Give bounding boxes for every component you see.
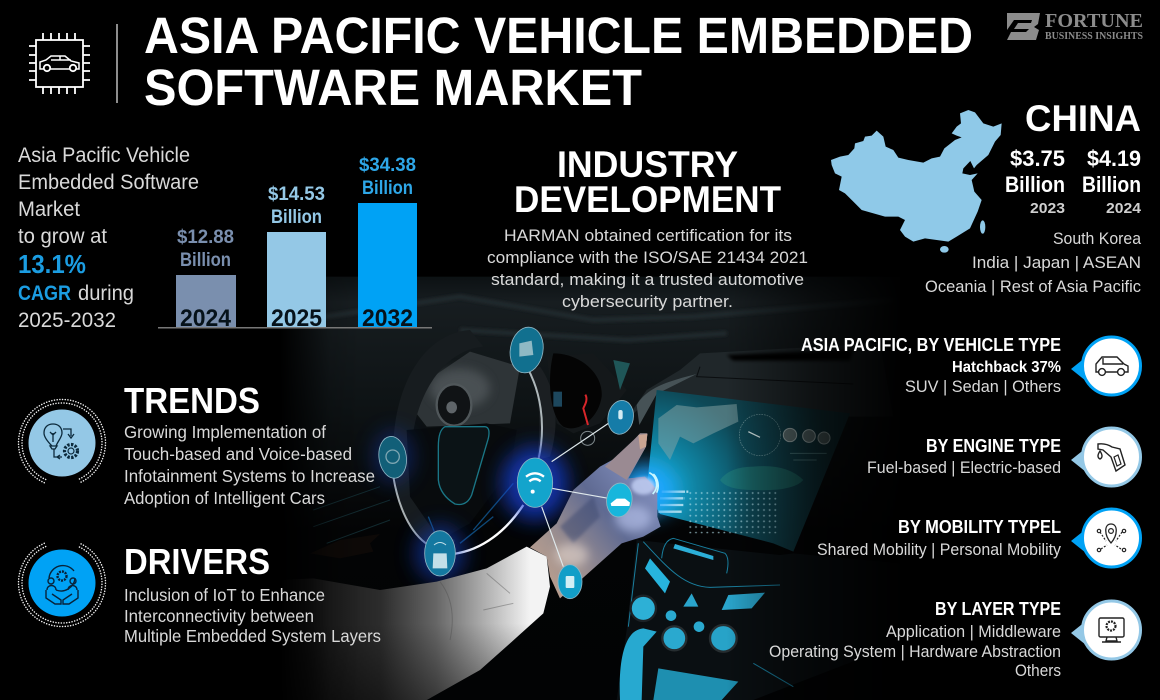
bar chart: market size: Billion <box>180 250 231 271</box>
panel: by vehicle type <box>801 335 1140 396</box>
other countries list: Oceania | Rest of Asia Pacific <box>925 277 1141 296</box>
panel: by mobility type: Shared Mobility | Personal Mobility <box>817 540 1061 559</box>
panel: drivers: Multiple Embedded System Layers <box>124 626 381 646</box>
icon nodes <box>376 325 636 599</box>
bar chart: market size: $12.88 <box>177 227 234 248</box>
panel: by layer type: Application | Middleware <box>886 622 1061 641</box>
bar chart: market size: Billion <box>362 178 413 199</box>
logo: Fortune Business Insights: BUSINESS INSIGHTS <box>1045 31 1143 42</box>
panel: drivers: Inclusion of IoT to Enhance <box>124 585 325 605</box>
panel: trends: Adoption of Intelligent Cars <box>124 488 325 508</box>
logo: Fortune Business Insights <box>1007 10 1143 42</box>
panel: trends: Infotainment Systems to Increase <box>124 466 375 486</box>
bar chart: market size: $34.38 <box>359 155 416 176</box>
market growth text <box>18 144 199 332</box>
China market values: $3.75 <box>1010 146 1065 171</box>
bar chart: market size <box>158 155 432 332</box>
market growth text: Embedded Software <box>18 171 199 194</box>
panel: by layer type: BY LAYER TYPE <box>935 599 1061 619</box>
map: China <box>831 110 1002 253</box>
panel: trends: TRENDS <box>124 380 260 421</box>
China market values: Billion <box>1082 172 1141 197</box>
infotainment screen <box>647 390 850 552</box>
panel: by layer type <box>769 599 1140 680</box>
glows <box>618 465 675 515</box>
sleeve <box>280 547 550 700</box>
China market values: $4.19 <box>1087 146 1141 171</box>
industry development text <box>487 226 808 311</box>
industry development text: HARMAN obtained certification for its <box>504 226 792 245</box>
title: ASIA PACIFIC VEHICLE EMBEDDED <box>144 7 973 64</box>
other countries list: South Korea <box>1053 229 1142 248</box>
panel: by engine type <box>867 428 1140 486</box>
panel: by engine type: BY ENGINE TYPE <box>926 436 1061 456</box>
market growth text: 13.1% <box>18 249 86 279</box>
panel: by engine type: Fuel-based | Electric-based <box>867 458 1061 477</box>
icon: trends lightbulb and gear <box>18 399 105 483</box>
photo: hand touching car infotainment dashboard <box>280 277 900 700</box>
title <box>144 7 973 116</box>
China market values: 2024 <box>1106 200 1142 217</box>
panel: drivers: DRIVERS <box>124 541 270 582</box>
market growth text: 2025-2032 <box>18 309 116 332</box>
industry development text: cybersecurity partner. <box>562 292 733 311</box>
panel: by mobility type: BY MOBILITY TYPEL <box>898 517 1061 537</box>
bar chart: market size: Billion <box>271 207 322 228</box>
other countries list <box>925 229 1142 296</box>
panel: trends: Growing Implementation of <box>124 422 326 442</box>
industry development heading: INDUSTRY <box>557 144 738 185</box>
market growth text: to grow at <box>18 225 107 248</box>
industry development text: compliance with the ISO/SAE 21434 2021 <box>487 248 808 267</box>
industry development heading <box>514 144 781 220</box>
industry development heading: DEVELOPMENT <box>514 179 781 220</box>
bar chart: market size: 2024 <box>180 305 232 332</box>
other countries list: India | Japan | ASEAN <box>972 253 1141 272</box>
market growth text: CAGR <box>18 282 71 305</box>
bar chart: market size: 2025 <box>271 305 322 332</box>
panel: trends: Touch-based and Voice-based <box>124 444 352 464</box>
icon: drivers hands and gear <box>18 543 105 627</box>
China market values: 2023 <box>1030 200 1065 217</box>
China market values: Billion <box>1005 172 1065 197</box>
market growth text: during <box>78 282 134 305</box>
bar chart: market size: $14.53 <box>268 184 325 205</box>
China heading: CHINA <box>1025 98 1141 139</box>
header divider <box>116 24 118 103</box>
industry development text: standard, making it a trusted automotive <box>491 270 804 289</box>
panel: trends <box>18 380 375 508</box>
panel: by mobility type <box>817 509 1140 567</box>
steering wheel upper <box>417 352 519 426</box>
logo: Fortune Business Insights: FORTUNE <box>1045 10 1143 32</box>
market growth text: Market <box>18 198 80 221</box>
China market values <box>1005 146 1142 217</box>
instrument cluster <box>567 427 588 433</box>
center console <box>617 540 791 700</box>
panel: by vehicle type: SUV | Sedan | Others <box>905 377 1061 396</box>
panel: drivers: Interconnectivity between <box>124 606 314 626</box>
panel: by layer type: Others <box>1015 661 1061 680</box>
market growth text: Asia Pacific Vehicle <box>18 144 190 167</box>
dashboard hood <box>633 348 828 413</box>
panel: by vehicle type: ASIA PACIFIC, BY VEHICLE TYPE <box>801 335 1061 355</box>
hand <box>530 433 661 598</box>
bar chart: market size: 2032 <box>362 305 413 332</box>
panel: by vehicle type: Hatchback 37% <box>952 359 1061 376</box>
header icon: car in microchip <box>29 33 90 94</box>
panel: by layer type: Operating System | Hardware Abstraction <box>769 642 1061 661</box>
connector lines <box>542 423 608 567</box>
panel: drivers <box>18 541 381 646</box>
title: SOFTWARE MARKET <box>144 59 642 116</box>
